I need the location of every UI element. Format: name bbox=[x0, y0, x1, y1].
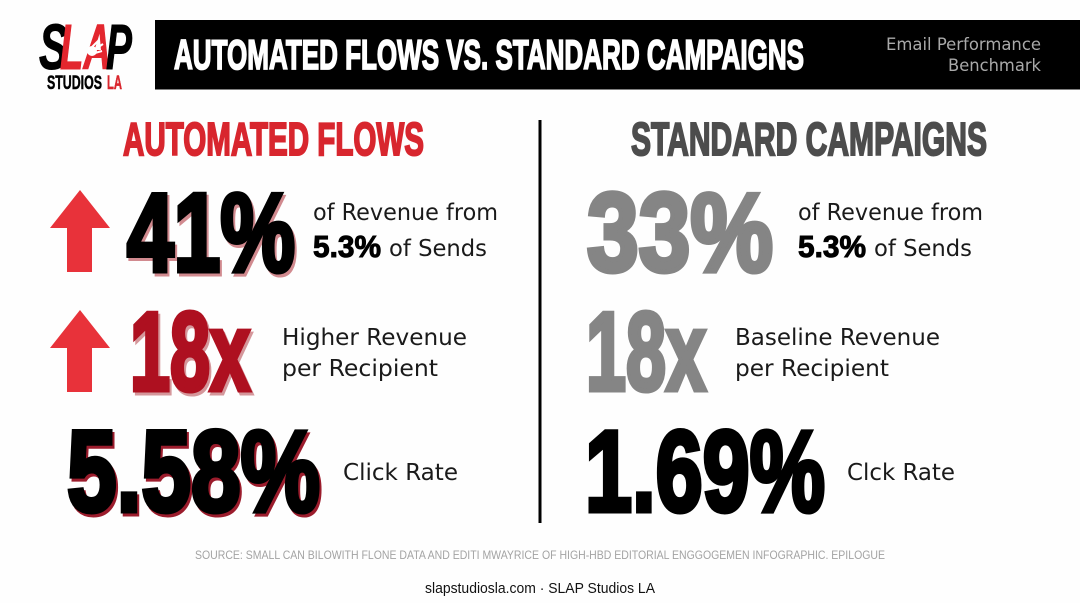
logo: SLAP Studios LA: LA bbox=[107, 73, 122, 94]
stat: 5.58%: 5.58% bbox=[69, 411, 322, 539]
stat: 1.69%: 1.69% bbox=[585, 408, 825, 536]
icon: up arrow 18x bbox=[50, 310, 110, 392]
divider bbox=[538, 120, 542, 523]
text: revenue share: of Revenue from bbox=[313, 200, 498, 226]
stat: 18x: 18x bbox=[132, 293, 252, 417]
header subtitle: Benchmark bbox=[948, 56, 1041, 76]
stat: 41%: 41% bbox=[127, 171, 295, 295]
text: revenue share bbox=[798, 200, 983, 264]
text: revenue share: of Revenue from bbox=[798, 200, 983, 226]
text: baseline revenue: Baseline Revenue bbox=[735, 325, 940, 351]
stat: 5.58%: 5.58% bbox=[67, 408, 320, 536]
text: click rate: Click Rate bbox=[343, 460, 458, 486]
stat: 18x bbox=[130, 290, 252, 417]
stat: 18x: 18x bbox=[586, 290, 706, 414]
logo: SLAP Studios LA bbox=[39, 11, 132, 94]
heading: automated flows: AUTOMATED FLOWS bbox=[123, 113, 424, 165]
stat: 41%: 41% bbox=[129, 174, 297, 298]
header bar bbox=[155, 20, 1080, 90]
panel: standard campaigns metrics bbox=[585, 171, 983, 536]
text: revenue share: 5.3% bbox=[798, 229, 866, 264]
panel: automated flows metrics bbox=[50, 171, 498, 539]
text: higher revenue: per Recipient bbox=[282, 356, 438, 382]
stat: 33%: 33% bbox=[587, 171, 773, 295]
text: revenue share: 5.3% bbox=[313, 229, 381, 264]
text: click rate: Clck Rate bbox=[847, 460, 955, 486]
footer: slapstudiosla.com · SLAP Studios LA bbox=[425, 580, 655, 597]
stat: 18x: 18x bbox=[130, 290, 250, 414]
source note: SOURCE: SMALL CAN BILOWITH FLONE DATA AND EDITI MWAYRICE OF HIGH-HBD EDITORIAL ENGGOGEMEN INFOGRAPHIC. EPILOGUE bbox=[195, 548, 885, 562]
logo: SLAP Studios LA: P bbox=[106, 11, 132, 83]
text: revenue share: of Sends bbox=[389, 236, 487, 262]
text: baseline revenue: per Recipient bbox=[735, 356, 889, 382]
text: higher revenue bbox=[282, 325, 467, 382]
logo: SLAP Studios LA: LA bbox=[60, 11, 111, 83]
text: baseline revenue bbox=[735, 325, 940, 382]
header subtitle bbox=[886, 35, 1041, 76]
text: revenue share bbox=[313, 200, 498, 264]
logo: SLAP Studios LA: STUDIOS bbox=[47, 73, 102, 94]
icon: up arrow 41% bbox=[50, 190, 110, 272]
logo: SLAP Studios LA: S bbox=[39, 11, 68, 83]
header subtitle: Email Performance bbox=[886, 35, 1041, 55]
text: revenue share: of Sends bbox=[874, 236, 972, 262]
text: higher revenue: Higher Revenue bbox=[282, 325, 467, 351]
